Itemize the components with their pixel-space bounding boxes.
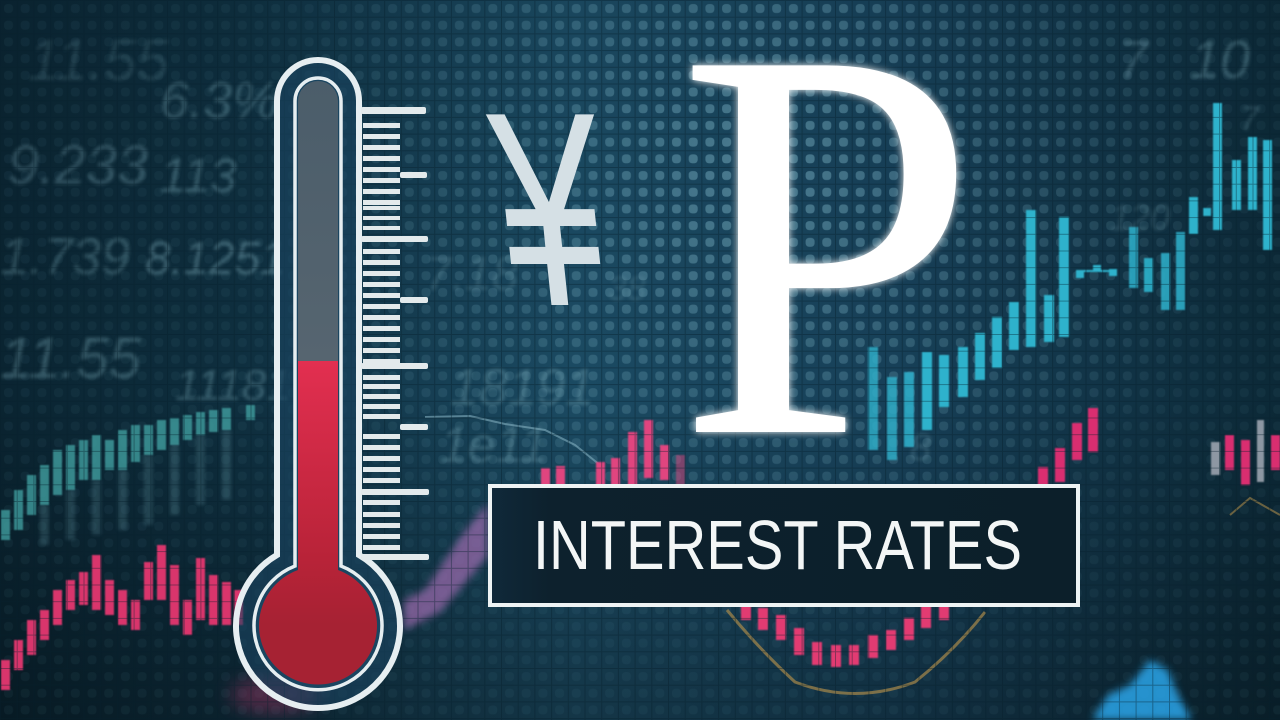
thermometer inner tube outline	[254, 78, 382, 690]
ghost market numbers: 8	[910, 427, 931, 469]
ghost market numbers: 7	[1118, 30, 1150, 90]
thermometer minor ticks	[363, 123, 400, 550]
ghost market numbers: 113	[160, 150, 237, 203]
label box: interest rates	[490, 486, 1078, 605]
ghost market numbers: 11.55	[0, 326, 142, 391]
ghost market numbers: 6.3%	[160, 72, 279, 130]
thermometer	[236, 60, 429, 708]
ghost market numbers: 8.1251	[145, 232, 286, 284]
ghost market numbers: 18191	[450, 359, 595, 417]
chart: pink candles right of label	[1038, 408, 1098, 485]
thermometer outer shell	[236, 60, 400, 708]
brown trend curve	[727, 610, 985, 694]
purple band chart	[404, 503, 488, 630]
ghost market numbers: 7	[1240, 100, 1260, 138]
chart: pink candles under the label	[741, 605, 949, 667]
thin trend line	[425, 416, 600, 465]
currency symbol: yen: ¥	[479, 55, 620, 364]
thermometer red mercury	[259, 361, 377, 685]
ghost market numbers	[0, 28, 1260, 473]
chart: faded bars under teal	[40, 430, 231, 545]
ghost market numbers: 10	[1190, 30, 1250, 90]
ghost market numbers: 1.739	[0, 228, 130, 286]
label text: INTEREST RATES	[533, 506, 1022, 584]
chart: small tan curve far right	[1230, 498, 1280, 515]
chart: pink candles left	[1, 545, 243, 690]
chart: teal candles left	[1, 405, 255, 540]
chart: teal candles right	[868, 103, 1272, 460]
thermometer glass	[298, 81, 338, 361]
ghost market numbers: 9.233	[8, 133, 148, 196]
ghost market numbers: 7.18	[425, 248, 519, 301]
thermometer major ticks	[361, 107, 429, 560]
pink glow near bulb	[230, 677, 320, 713]
ghost market numbers: 38	[608, 270, 646, 308]
blue glow bottom right	[1092, 660, 1192, 720]
chart: candles far right	[1211, 420, 1280, 485]
ghost market numbers: 11181	[175, 361, 291, 410]
chart: pink candles centre	[541, 420, 685, 486]
ghost market numbers: 120	[1110, 197, 1170, 238]
ghost market numbers: 11.55	[28, 28, 170, 93]
ghost market numbers: 1e11	[440, 417, 548, 473]
